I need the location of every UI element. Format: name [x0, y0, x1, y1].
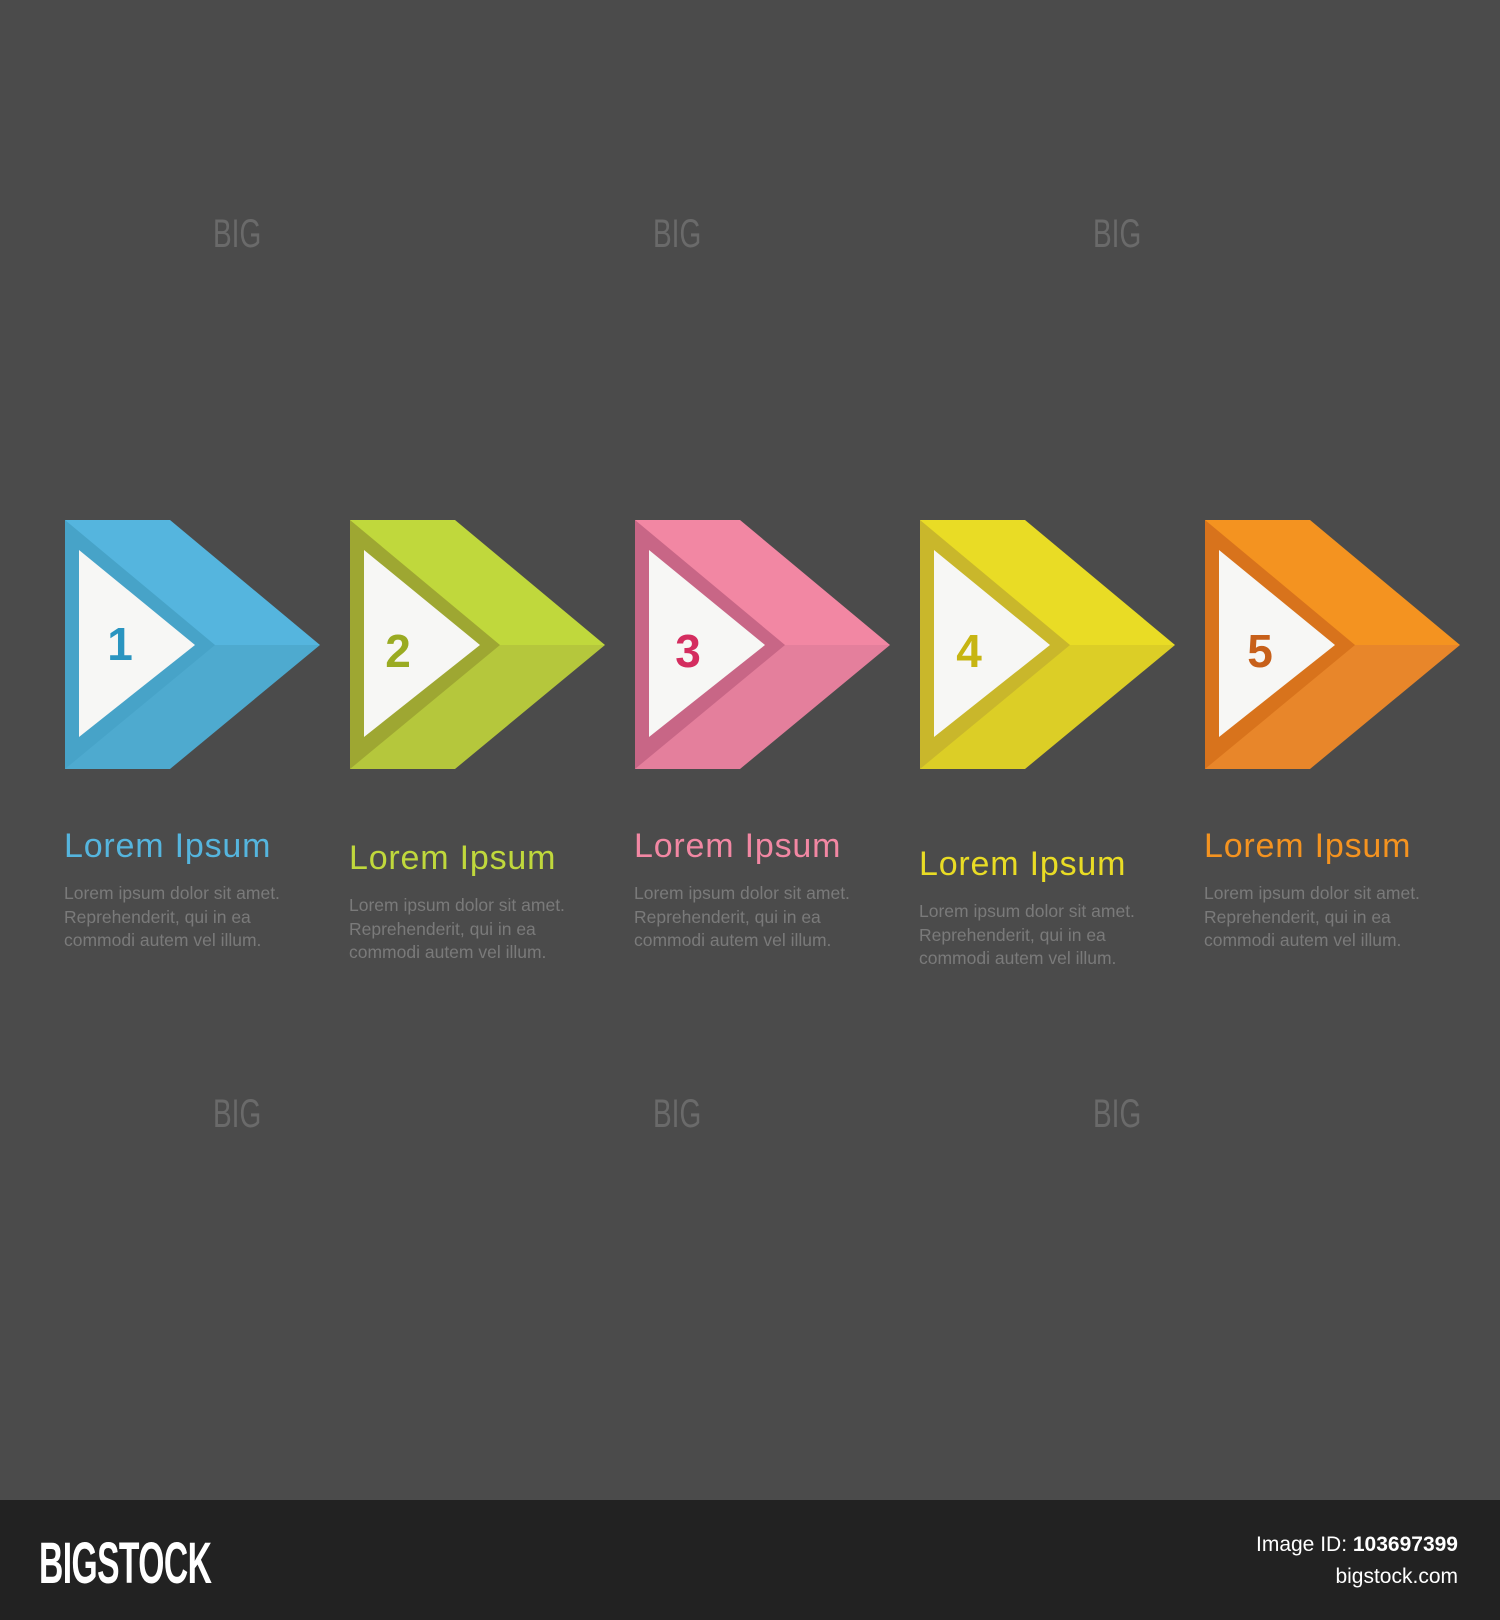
- footer image id: [1256, 1533, 1458, 1588]
- watermark: BIG marks: BIG: [653, 212, 701, 256]
- watermark: BIG marks: BIG: [213, 212, 261, 256]
- text block 3: Lorem ipsum dolor sit amet.: [634, 883, 850, 903]
- watermark: BIG marks: BIG: [653, 1092, 701, 1136]
- text block 2: Lorem Ipsum: [349, 839, 556, 877]
- arrow 1 blue: 1: [107, 618, 133, 670]
- text block 1: commodi autem vel illum.: [64, 930, 261, 950]
- text block 4: Lorem ipsum dolor sit amet.: [919, 901, 1135, 921]
- arrow 2 green: 2: [385, 625, 411, 677]
- arrow 3 pink: [635, 520, 890, 769]
- text block 4: Lorem Ipsum: [919, 845, 1126, 883]
- text block 5: Lorem ipsum dolor sit amet.: [1204, 883, 1420, 903]
- text block 1: Reprehenderit, qui in ea: [64, 906, 251, 926]
- text block 1: Lorem Ipsum: [64, 827, 271, 865]
- text block 4: Reprehenderit, qui in ea: [919, 924, 1106, 944]
- text block 1: Lorem ipsum dolor sit amet.: [64, 883, 280, 903]
- arrow 4 yellow: [920, 520, 1175, 769]
- text block 3: [634, 827, 850, 950]
- text block 4: commodi autem vel illum.: [919, 948, 1116, 968]
- text block 2: [349, 839, 565, 962]
- watermark: BIG marks: BIG: [213, 1092, 261, 1136]
- footer logo: BIGSTOCK: [39, 1531, 211, 1596]
- text block 5: [1204, 827, 1420, 950]
- arrow 5 orange: 5: [1247, 625, 1273, 677]
- arrow 4 yellow: 4: [956, 625, 982, 677]
- footer image id: Image ID: 103697399: [1256, 1533, 1458, 1556]
- text block 2: commodi autem vel illum.: [349, 942, 546, 962]
- watermark: BIG marks: BIG: [1093, 212, 1141, 256]
- text block 1: [64, 827, 280, 950]
- text block 5: commodi autem vel illum.: [1204, 930, 1401, 950]
- text block 5: Reprehenderit, qui in ea: [1204, 906, 1391, 926]
- footer image id: bigstock.com: [1335, 1565, 1458, 1588]
- watermark: BIG marks: BIG: [1093, 1092, 1141, 1136]
- arrow 5 orange: [1205, 520, 1460, 769]
- text block 3: Reprehenderit, qui in ea: [634, 906, 821, 926]
- text block 4: [919, 845, 1135, 968]
- footer bar: [0, 1500, 1500, 1620]
- arrow 1 blue: [65, 520, 320, 769]
- text block 3: Lorem Ipsum: [634, 827, 841, 865]
- arrow 3 pink: 3: [675, 625, 701, 677]
- text block 2: Lorem ipsum dolor sit amet.: [349, 895, 565, 915]
- arrow 2 green: [350, 520, 605, 769]
- text block 2: Reprehenderit, qui in ea: [349, 918, 536, 938]
- arrows row: [65, 520, 1460, 769]
- text block 3: commodi autem vel illum.: [634, 930, 831, 950]
- text block 5: Lorem Ipsum: [1204, 827, 1411, 865]
